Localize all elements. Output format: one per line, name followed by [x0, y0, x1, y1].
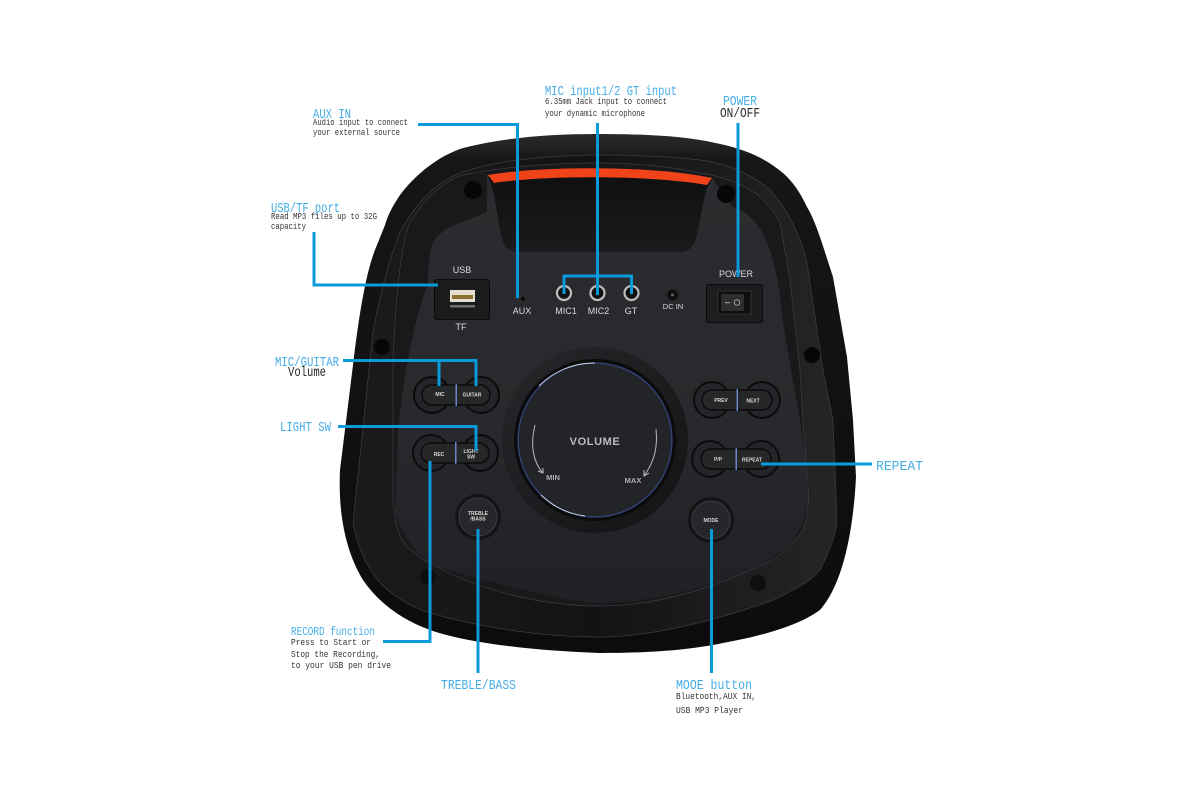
speaker front panel: [395, 175, 808, 603]
arrow: POWER line: [736, 123, 740, 277]
power switch: POWER: [719, 269, 753, 279]
volume arc right: [644, 429, 656, 476]
PREV NEXT button pair: NEXT: [746, 398, 760, 404]
arrow: MIC lines: [564, 123, 632, 295]
volume knob: [502, 347, 688, 533]
callout: MIC/GUITAR volume: [275, 356, 339, 381]
callout: MIC input: [545, 85, 677, 119]
callout: AUX IN: AUX IN: [313, 108, 351, 123]
callout: RECORD function: Stop the Recording,: [291, 650, 380, 660]
callout: RECORD function: to your USB pen drive: [291, 661, 391, 671]
speaker mid band: [353, 155, 837, 637]
callout: POWER: POWER: [723, 95, 757, 110]
MIC and GT jacks: [555, 286, 638, 316]
callout: USB/TF port: capacity: [271, 222, 306, 232]
callout: MODE button: Bluetooth,AUX IN,: [676, 692, 756, 702]
callout: MIC input: 6.35mm Jack input to connect: [545, 97, 667, 107]
callout: RECORD function: [291, 626, 391, 671]
DC IN jack: [663, 290, 683, 311]
arrow: MIC/GUITAR lines: [343, 360, 476, 386]
speaker outer shell: [340, 134, 856, 653]
arrow: TREBLE line: [476, 529, 480, 673]
MIC and GT jacks: MIC1: [555, 306, 577, 316]
callout: USB/TF port: Read MP3 files up to 32G: [271, 212, 377, 222]
MIC and GT jacks: MIC2: [588, 306, 609, 316]
callout: MODE button: MOOE button: [676, 679, 752, 694]
volume knob: MAX: [625, 476, 641, 485]
callout: RECORD function: Press to Start or: [291, 638, 371, 648]
P/P REPEAT button pair: REPEAT: [742, 458, 762, 464]
callout: MODE button: [676, 679, 756, 716]
callout: POWER: [720, 95, 760, 122]
callout: MIC/GUITAR volume: MIC/GUITAR: [275, 356, 339, 371]
callout: POWER: ON/OFF: [720, 107, 760, 122]
callout: MIC input: MIC input1/2 GT input: [545, 85, 677, 100]
DC IN jack: DC IN: [663, 302, 683, 311]
callout: AUX IN: your external source: [313, 128, 400, 138]
MIC and GT jacks: GT: [625, 306, 638, 316]
REC LIGHT SW button pair: SW: [467, 454, 475, 460]
AUX jack: AUX: [513, 306, 531, 316]
TREBLE BASS button: /BASS: [470, 516, 486, 522]
power switch: [706, 269, 762, 322]
callout: RECORD function: RECORD function: [291, 626, 375, 639]
callout: MODE button: USB MP3 Player: [676, 706, 743, 716]
TREBLE BASS button: TREBLE: [468, 511, 489, 517]
arrow: REPEAT line: [761, 462, 872, 466]
arrow: LIGHT SW line: [338, 426, 476, 451]
callout: AUX IN: [313, 108, 408, 138]
MIC GUITAR button pair: [414, 377, 499, 413]
volume knob: MIN: [546, 473, 560, 482]
REC LIGHT SW button pair: [413, 435, 498, 471]
MODE button: MODE: [704, 518, 719, 524]
arrow: RECORD line: [383, 461, 430, 642]
MIC GUITAR button pair: MIC: [435, 392, 445, 398]
callout: REPEAT: REPEAT: [876, 460, 923, 475]
callout: USB/TF port: [271, 202, 377, 232]
AUX jack: [513, 296, 531, 316]
orange handle strip: [488, 168, 712, 185]
arrow: AUX line: [418, 124, 518, 298]
P/P REPEAT button pair: [692, 441, 779, 477]
screw holes: [374, 181, 820, 591]
REC LIGHT SW button pair: LIGHT: [464, 449, 478, 455]
TREBLE BASS button: [455, 494, 501, 540]
handle recess: [488, 168, 712, 252]
USB TF port module: TF: [456, 322, 467, 332]
PREV NEXT button pair: [694, 382, 780, 418]
MIC GUITAR button pair: GUITAR: [463, 392, 482, 398]
speaker inner band: [393, 163, 808, 606]
callout: MIC/GUITAR volume: Volume: [288, 366, 326, 381]
volume arc left: [533, 425, 543, 473]
callout: TREBLE/BASS: TREBLE/BASS: [441, 679, 516, 694]
speaker product photo: [340, 134, 856, 653]
callout: MIC input: your dynamic microphone: [545, 109, 645, 119]
PREV NEXT button pair: PREV: [714, 398, 728, 404]
arrow: MODE line: [710, 529, 713, 673]
P/P REPEAT button pair: P/P: [714, 457, 723, 463]
callout: LIGHT SW: LIGHT SW: [280, 421, 332, 436]
USB TF port module: USB: [453, 265, 471, 275]
callout: AUX IN: Audio input to connect: [313, 118, 408, 128]
callout: USB/TF port: USB/TF port: [271, 202, 340, 217]
MODE button: [688, 497, 734, 543]
USB TF port module: [434, 265, 490, 332]
volume knob: VOLUME: [570, 436, 620, 448]
arrow: USB line: [314, 232, 438, 285]
REC LIGHT SW button pair: REC: [434, 452, 445, 458]
